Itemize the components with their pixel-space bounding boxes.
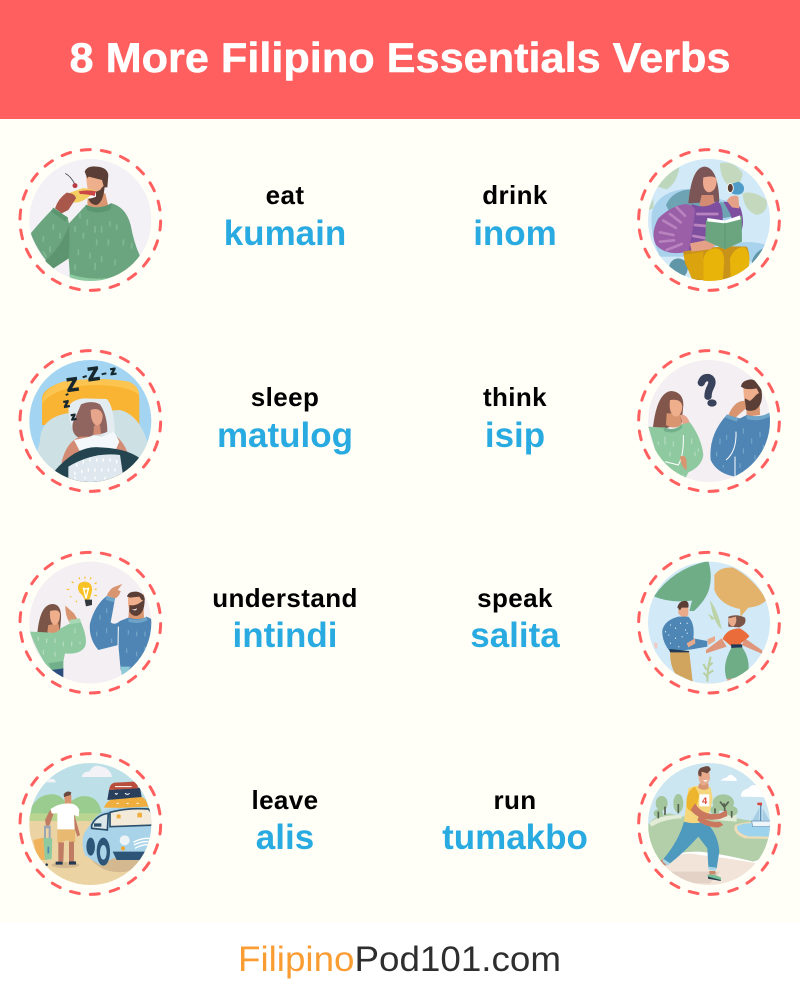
text: drink / inom <box>473 180 557 253</box>
icon: couple with light bulb <box>18 550 162 694</box>
icon: man running in park <box>637 752 781 896</box>
text: think / isip: isip <box>485 416 545 455</box>
icon: woman sleeping: z <box>62 396 70 411</box>
title: 8 More Filipino Essentials Verbs <box>70 34 730 81</box>
icon: woman sleeping: z <box>70 411 77 423</box>
icon: couple thinking <box>637 349 781 493</box>
text: run / tumakbo: tumakbo <box>442 818 588 857</box>
text: think / isip <box>483 382 547 455</box>
text: eat / kumain: eat <box>266 180 304 210</box>
footer <box>0 923 800 1000</box>
text: understand / intindi <box>212 583 358 655</box>
icon: woman reading and drinking <box>637 148 781 292</box>
text: understand / intindi: understand <box>212 583 358 613</box>
icon: woman sleeping: Z <box>65 373 80 396</box>
footer logo text: FilipinoPod101.com <box>238 940 561 979</box>
text: drink / inom: drink <box>482 180 548 210</box>
icon: man leaving with packed car <box>18 752 162 896</box>
icon: question mark <box>701 378 717 407</box>
text: understand / intindi: intindi <box>233 616 337 655</box>
icon: couple talking with speech bubbles <box>637 550 781 694</box>
icon: woman sleeping: Z <box>86 363 101 385</box>
text: sleep / matulog: sleep <box>251 382 319 412</box>
text: run / tumakbo: run <box>493 785 537 815</box>
text: sleep / matulog <box>217 382 353 455</box>
text: eat / kumain <box>224 180 346 253</box>
text: speak / salita: salita <box>470 616 560 655</box>
text: eat / kumain: kumain <box>224 214 346 253</box>
text: sleep / matulog: matulog <box>217 416 353 455</box>
text: leave / alis: leave <box>251 785 319 815</box>
text: run / tumakbo <box>442 785 588 857</box>
text: drink / inom: inom <box>473 214 557 253</box>
text: leave / alis <box>251 785 319 857</box>
text: leave / alis: alis <box>256 818 314 857</box>
text: speak / salita: speak <box>477 583 553 613</box>
icon: woman sleeping <box>18 349 162 493</box>
text: think / isip: think <box>483 382 547 412</box>
header banner <box>0 0 800 119</box>
text: speak / salita <box>470 583 560 655</box>
icon: man eating a hot dog <box>18 148 162 292</box>
icon: man running in park: 4 <box>702 796 708 806</box>
icon: woman sleeping: z <box>109 363 117 378</box>
icon: light bulb <box>67 577 97 606</box>
